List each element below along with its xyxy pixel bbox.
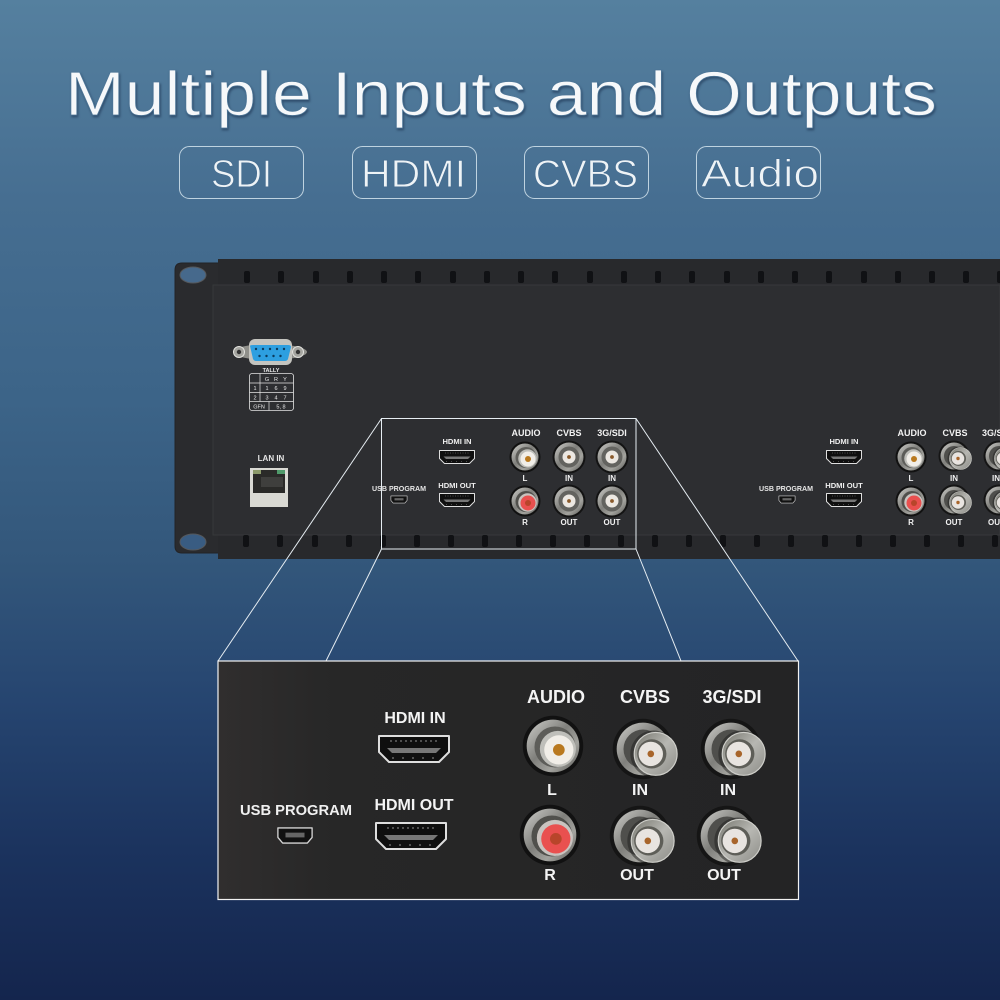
HDMI out port 2 — [826, 494, 862, 506]
label: HDMI OUT: HDMI OUT — [438, 481, 476, 490]
audio column: L — [523, 474, 528, 483]
3G/SDI column: IN — [608, 474, 616, 483]
large HDMI out port — [376, 823, 446, 849]
large HDMI in port — [379, 736, 449, 762]
tally pin table: G — [265, 377, 269, 383]
audio column: AUDIO — [512, 428, 540, 438]
audio column 2 — [896, 428, 926, 527]
icon: DB9 tally connector — [233, 339, 307, 365]
mounting hole top — [180, 267, 206, 283]
tally pin table: R — [274, 377, 278, 383]
CVBS column large: IN — [632, 782, 648, 799]
USB port 2 — [779, 496, 795, 503]
3G/SDI column large: OUT — [707, 867, 741, 884]
title: Multiple Inputs and Outputs — [65, 60, 937, 129]
inset panel: magnified connectors — [218, 661, 798, 900]
zoom highlight box and guide lines — [218, 418, 798, 661]
3G/SDI column: 3G/SDI — [597, 428, 627, 438]
audio column 2: R — [908, 518, 914, 527]
audio column large: L — [547, 782, 557, 799]
label: HDMI IN: HDMI IN — [442, 437, 472, 446]
label: HDMI OUT 2: HDMI OUT — [825, 481, 863, 490]
audio column large — [520, 687, 585, 884]
tally pin table — [250, 368, 294, 410]
tag: SDI: SDI — [211, 153, 272, 196]
label: HDMI IN large: HDMI IN — [384, 710, 446, 727]
3G/SDI column — [596, 428, 628, 527]
USB port — [391, 496, 407, 503]
tag: CVBS: CVBS — [533, 153, 638, 196]
vent slots — [243, 271, 1000, 547]
inset background — [218, 661, 798, 900]
3G/SDI column 2, cropped at edge — [982, 428, 1000, 527]
tally pin table: 6 — [274, 386, 278, 392]
inner plate — [213, 285, 1000, 535]
label: HDMI OUT large: HDMI OUT — [374, 797, 454, 814]
mounting hole bottom — [180, 534, 206, 550]
tag: SDI — [180, 146, 304, 198]
HDMI in port 2 — [826, 450, 862, 464]
audio column — [510, 428, 540, 527]
tally pin table: 3 — [265, 396, 269, 402]
LAN port: LAN IN — [258, 454, 285, 463]
CVBS column: OUT — [561, 518, 578, 527]
tally pin table: 1 — [265, 386, 269, 392]
large USB port — [278, 828, 312, 843]
CVBS column — [552, 428, 586, 527]
LAN port — [250, 454, 288, 507]
tag: Audio — [696, 146, 820, 198]
audio column large: R — [544, 867, 556, 884]
tally pin table: 4 — [274, 396, 278, 402]
connector group: first monitor — [372, 428, 628, 527]
audio column 2: AUDIO — [898, 428, 926, 438]
CVBS column large: OUT — [620, 867, 654, 884]
tag: Audio: Audio — [701, 153, 819, 196]
CVBS column 2: OUT — [946, 518, 963, 527]
CVBS column: CVBS — [556, 428, 582, 438]
tag: HDMI — [352, 146, 476, 198]
3G/SDI column large: 3G/SDI — [702, 687, 762, 707]
tally pin table: 5, 8 — [276, 404, 286, 410]
3G/SDI column large: IN — [720, 782, 736, 799]
CVBS column 2: IN — [950, 474, 958, 483]
rack panel — [175, 259, 1000, 559]
audio column large: AUDIO — [527, 687, 585, 707]
HDMI out port — [440, 494, 474, 506]
label: HDMI IN 2: HDMI IN — [829, 437, 859, 446]
HDMI in port — [440, 450, 474, 464]
format tags — [180, 146, 820, 198]
3G/SDI column 2, cropped at edge: IN — [992, 474, 1000, 483]
connector group: second monitor — [759, 428, 1000, 527]
chassis body — [218, 259, 1000, 559]
CVBS column large: CVBS — [620, 687, 670, 707]
tally pin table: Y — [283, 377, 287, 383]
tag: HDMI: HDMI — [361, 153, 466, 196]
rack ears — [175, 263, 225, 553]
tally pin table: 1 — [253, 386, 257, 392]
tally pin table: GFN — [253, 404, 265, 410]
3G/SDI column: OUT — [604, 518, 621, 527]
CVBS column: IN — [565, 474, 573, 483]
audio column 2: L — [909, 474, 914, 483]
audio column: R — [522, 518, 528, 527]
label: USB PROGRAM large: USB PROGRAM — [240, 803, 352, 819]
tally pin table: TALLY — [263, 368, 280, 374]
CVBS column 2 — [938, 428, 972, 527]
tally pin table: 2 — [253, 396, 257, 402]
label: USB PROGRAM: USB PROGRAM — [372, 484, 426, 493]
tally pin table: 9 — [283, 386, 287, 392]
CVBS column large — [610, 687, 677, 884]
CVBS column 2: CVBS — [942, 428, 968, 438]
tally pin table: 7 — [283, 396, 287, 402]
label: USB PROGRAM 2: USB PROGRAM — [759, 484, 813, 493]
3G/SDI column large — [697, 687, 765, 884]
